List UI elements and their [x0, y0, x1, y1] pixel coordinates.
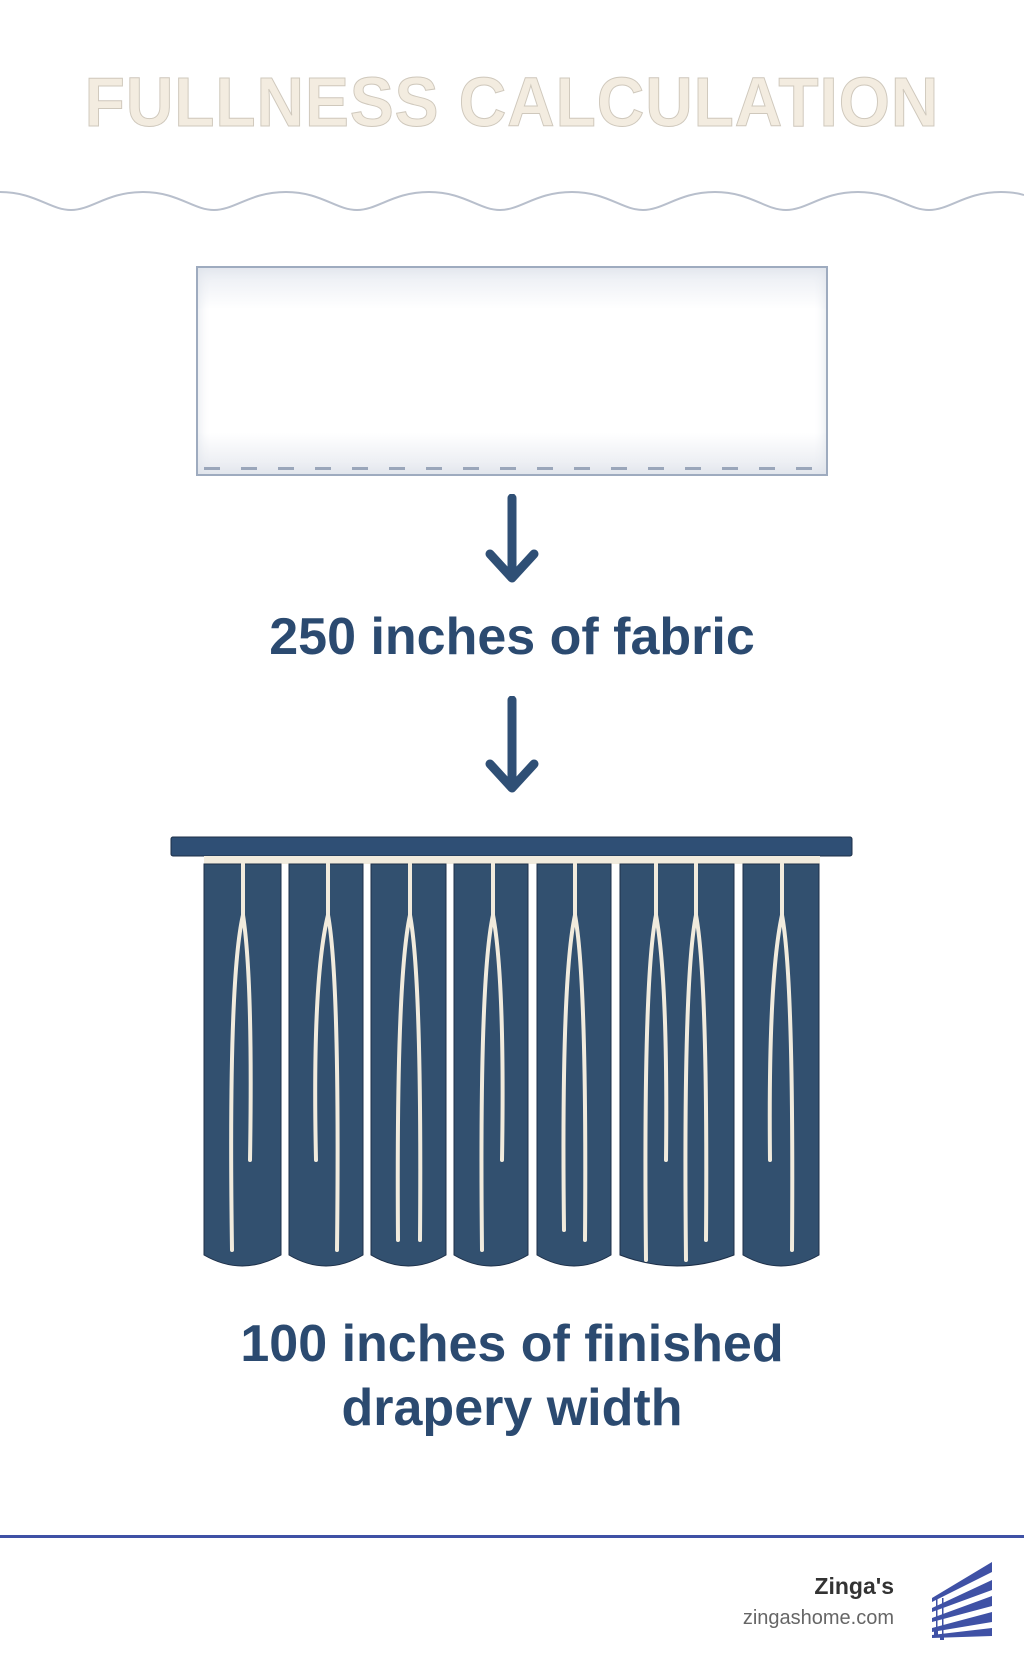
- footer rule: [0, 1535, 1024, 1538]
- footer brand: zingashome.com: [743, 1607, 894, 1629]
- arrow 2: [486, 696, 538, 792]
- fabric panel: [196, 266, 828, 476]
- text: 100 inches of finished drapery width: 100 inches of finished: [240, 1315, 784, 1373]
- title: FULLNESS CALCULATION: [85, 63, 939, 141]
- text: 100 inches of finished drapery width: [240, 1315, 784, 1437]
- drapery illustration: [170, 836, 852, 1266]
- text: 250 inches of fabric: 250 inches of fabric: [269, 608, 755, 666]
- wave divider: [0, 191, 1024, 211]
- text: 100 inches of finished drapery width: drapery width: [342, 1379, 682, 1437]
- footer brand: [743, 1573, 894, 1629]
- curtain rod: [171, 837, 852, 856]
- footer brand: Zinga's: [814, 1573, 894, 1599]
- icon: blinds logo: [932, 1562, 992, 1640]
- arrow 1: [486, 494, 538, 582]
